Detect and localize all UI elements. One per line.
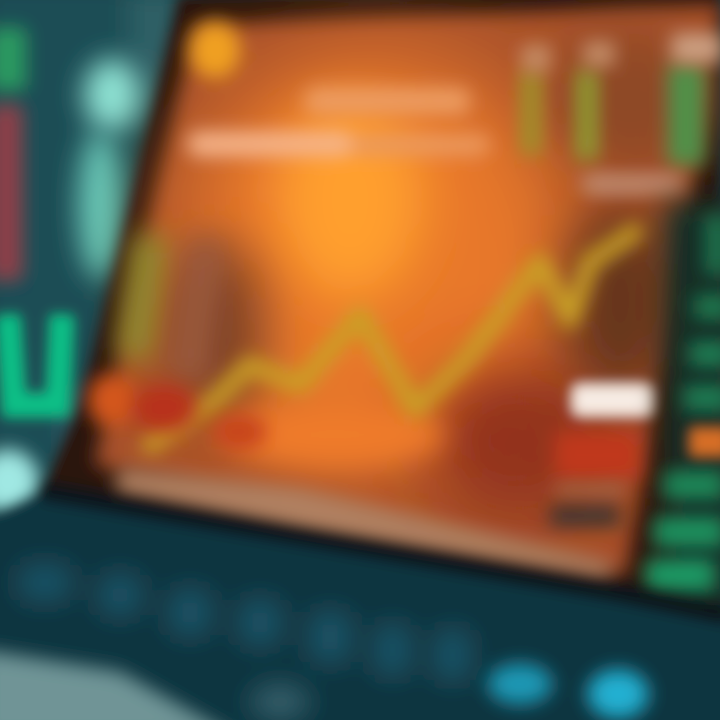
- line chart: yellow price line: [150, 232, 635, 445]
- dark right chart area: [430, 375, 620, 505]
- pale cyan blocks: [84, 59, 140, 131]
- keyboard key rows: [20, 565, 470, 680]
- bright green U shape: [8, 315, 62, 405]
- icon: orange logo badge: [190, 22, 240, 78]
- orange row: [690, 428, 720, 456]
- heading: blurred title text: [188, 88, 490, 156]
- pale cyan lower glow: [0, 450, 38, 514]
- icon: left monitor indicators: [0, 28, 140, 514]
- panel: left secondary monitor: [0, 0, 190, 510]
- text block: blurred small label: [582, 174, 682, 194]
- panel: right green data column: [646, 200, 720, 610]
- panel: orange trading screen: [95, 5, 720, 580]
- lower orange band: [225, 403, 445, 467]
- glowing cyan keys: [488, 664, 552, 704]
- red ticker blocks: [0, 105, 22, 280]
- callout: white price tag with red block: [550, 384, 652, 527]
- dark left chart area: [165, 240, 265, 420]
- pale bottom strip: [115, 468, 610, 580]
- pale desk corner: [0, 650, 240, 720]
- green ticker block: [0, 28, 26, 90]
- bar chart: left green and red candles: [88, 233, 268, 450]
- green rows: [705, 215, 720, 275]
- panel: laptop keyboard deck: [0, 490, 720, 720]
- bar chart: top right green candles: [520, 34, 720, 165]
